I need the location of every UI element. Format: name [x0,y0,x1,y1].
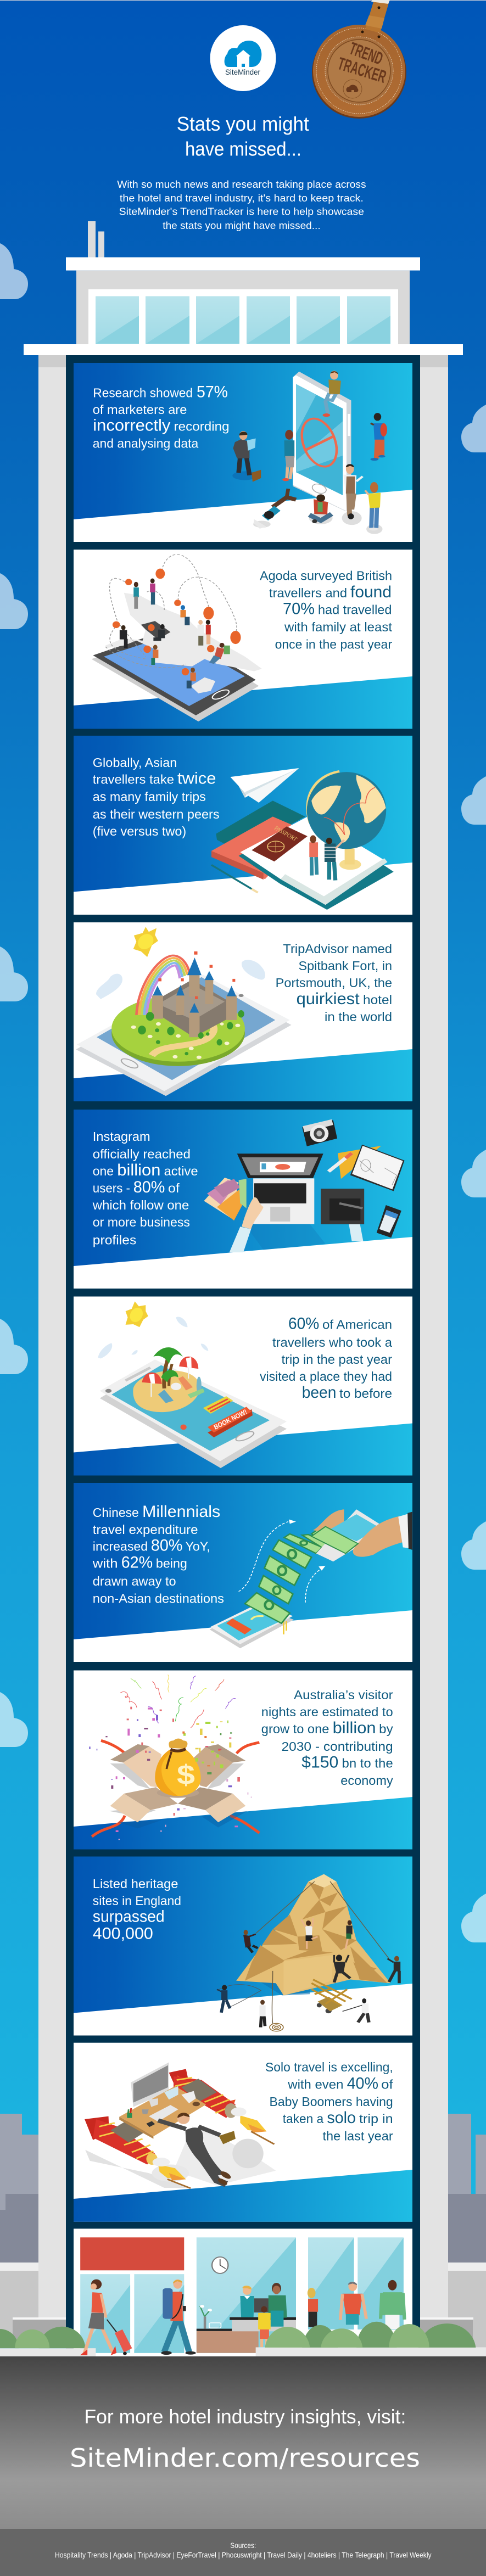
panel 9: heritage sites [74,1857,412,2036]
stat text: been [302,1384,336,1402]
bottom phone [210,1606,294,1648]
intro paragraph [117,178,366,231]
illustration: globe, books and passport [211,768,394,910]
palm tree [153,1347,183,1388]
desk [119,2086,206,2136]
rooftop chimneys [88,221,104,258]
panel 8: Australia visitor nights [74,1670,412,1849]
hands and sleeves [242,1197,264,1229]
stat text: 40% [347,2075,378,2093]
illustration: climbers on a low-poly mountain [217,1874,400,2031]
stat text [92,1129,198,1247]
coil of rope [270,2023,283,2031]
speech bubbles [113,569,241,675]
rockets [169,2069,236,2118]
stat text: Agoda surveyed British [260,569,392,583]
stat text: of [381,2077,393,2092]
stat text: 400,000 [93,1924,153,1942]
stat text: surpassed [93,1908,165,1926]
stat text: of American [322,1317,392,1331]
stat text: Spitbank Fort, in [299,959,392,973]
stat text [276,942,392,1024]
illustration: rocket-powered desk and flying businessman [85,2062,276,2188]
stat text: travellers take [93,772,174,787]
stat text: billion [117,1161,160,1179]
stat text: 62% [121,1553,153,1571]
trees and flowers [138,1010,244,1055]
stat text [265,2060,393,2143]
red sign [80,2237,184,2270]
panel 3: Asian family trips [74,736,412,915]
sidewalk [0,2348,96,2356]
stat text: $150 [301,1754,338,1772]
stat text: twice [177,770,216,788]
bag dollar sign: $ [177,1760,195,1790]
stat text: trip in the past year [281,1352,392,1367]
stat text: travellers and [269,586,347,600]
reception desk [197,2298,296,2353]
skyline: background city buildings [0,2114,486,2266]
stat text: Globally, Asian [93,755,177,770]
clouds [98,1317,208,1358]
stat text: Solo travel is excelling, [265,2060,393,2074]
open book [239,815,394,910]
stat text: incorrectly [93,416,170,434]
phone [100,1365,287,1468]
ribbons [92,1740,259,1836]
swatch fan [204,1178,247,1220]
pencil [211,865,256,892]
guests at right [308,2280,405,2329]
drawing tablet [321,1189,364,1224]
stat text: grow to one [261,1722,329,1736]
panel 6: American repeat travellers [74,1297,412,1476]
dashed routes [105,555,237,668]
stat text: with even [287,2077,343,2092]
backpacker [161,2280,196,2355]
stat text: in the world [325,1010,392,1024]
island [111,1000,245,1066]
box shadows [109,1763,244,1817]
stat text: 80% [133,1178,165,1196]
stat text: Australia’s visitor [294,1688,393,1702]
sand island [133,1370,200,1412]
panel 10: solo travel [74,2043,412,2222]
stat text: 57% [197,383,228,401]
footer: sources: Sources: [230,2541,256,2550]
stat text: sites in England [93,1894,181,1908]
confetti [89,1707,252,1840]
top floor windows [96,296,390,344]
luggage tag: Trend Tracker: TREND [347,38,386,69]
luggage tag: Trend Tracker [312,0,406,119]
stat text: and analysing data [93,436,198,450]
stat text: with [92,1556,118,1570]
stat text: 80% [151,1537,182,1555]
clouds [0,243,486,1942]
side walls and planters [0,2263,486,2348]
stat text [93,1877,181,1942]
stat text: Chinese [93,1505,139,1520]
umbrellas [142,1357,198,1397]
figure: man on phone [323,371,341,417]
stat text: quirkiest [297,990,360,1008]
stat text: Baby Boomers having [269,2095,393,2109]
stat text [260,1314,392,1402]
stat text: 2030 - contributing [281,1739,393,1754]
stat text: being [156,1556,187,1570]
intro paragraph: the hotel and travel industry, it's hard to keep track. [120,192,364,204]
panel 4: quirkiest hotel [74,922,412,1101]
intro paragraph: SiteMinder's TrendTracker is here to help showcase [119,206,364,217]
ropes [256,1881,389,2024]
logo: SiteMinder: SiteMinder [225,68,260,76]
stat text: TripAdvisor named [283,942,392,956]
footer url: SiteMinder.com/resources [70,2443,420,2473]
figure: woman with phone [282,430,294,481]
entrance windows [80,2237,404,2353]
smartphone [377,1205,401,1237]
clouds [96,974,122,999]
stat text: nights are estimated to [261,1705,393,1719]
stat text: by [379,1722,393,1736]
stat text: travellers who took a [272,1335,392,1349]
stat text: 70% [283,600,315,618]
passport [252,826,308,861]
stat text: (five versus two) [93,824,186,838]
stat text: Portsmouth, UK, the [276,976,392,990]
stat text: solo [327,2109,356,2127]
mountain [236,1874,390,1996]
hotel building [24,221,463,2354]
stat text [260,569,393,652]
stat text: of marketers are [93,402,187,417]
money stack on top [311,1526,358,1554]
stat text: travel expenditure [93,1522,198,1537]
globe [307,771,386,870]
stat text: to before [339,1386,392,1401]
figure: woman in yellow [365,482,381,530]
stat text: the last year [323,2129,393,2143]
figure: businessman with laptop [232,431,261,482]
stat text: had travelled [318,603,392,617]
camera [302,1119,337,1146]
button label: BOOK NOW! [213,1408,248,1431]
stat text: taken a [283,2112,323,2126]
stat text: YoY, [186,1539,210,1554]
stat text: users - [93,1181,130,1195]
panel 7: Chinese Millennials [74,1483,412,1662]
money bag [155,1739,201,1798]
intro paragraph: the stats you might have missed... [163,220,321,231]
stat text: non-Asian destinations [93,1591,224,1605]
stat text: Millennials [142,1503,220,1521]
wall clock [212,2257,228,2273]
illustration: phone with world map and people [91,555,262,721]
ruler and notebook [338,1146,381,1179]
monitor [131,2062,169,2107]
intro paragraph: With so much news and research taking place across [117,178,366,190]
castle [153,979,230,1037]
stat text: Instagram [93,1129,150,1144]
footer heading: For more hotel industry insights, visit: [85,2405,406,2428]
panel 1: marketers data [74,363,412,542]
stat text: bn to the [342,1756,393,1771]
scissor lift [311,1980,352,2013]
stat text: increased [93,1539,148,1554]
stat text [261,1688,393,1788]
woman guest [269,2283,287,2327]
brackets [181,2079,217,2102]
stat text [92,1503,224,1605]
stat text [93,383,230,450]
top phone and hand [313,1509,344,1535]
book now button [208,1409,253,1437]
paper plane [230,768,299,803]
streamers [120,1675,236,1728]
figure: lying woman [254,489,296,529]
stat text: or more business [93,1215,190,1229]
stat text: 60% [288,1314,319,1332]
logo: SiteMinder [210,25,276,91]
stat text: Research showed [93,386,193,400]
woman with suitcase [80,2280,132,2355]
illustration: money flying between phones [210,1509,412,1648]
map pieces [105,593,262,693]
footer: sources [0,2529,486,2576]
stat text: which follow one [92,1198,189,1212]
bushes: right group [265,2322,476,2348]
receptionist [240,2286,254,2317]
money bills [245,1524,358,1623]
stat text: active [164,1164,198,1178]
stat text [93,755,220,838]
stat text: officially reached [93,1147,191,1161]
stat text: with family at least [284,620,393,634]
dashed arrows [239,1522,321,1603]
figures [120,578,230,688]
books [216,800,305,852]
figures [309,835,344,880]
stat text: profiles [93,1233,136,1247]
passport label: PASSPORT [273,825,298,843]
illustration: people around a giant phone [232,371,387,534]
stat text: recording [174,419,230,433]
fire [240,2115,274,2144]
shadows [85,2150,191,2188]
stat text: visited a place they had [260,1369,392,1384]
illustration: laptop desk from above [204,1119,405,1252]
stat text: trip in [359,2112,393,2126]
hotel ground floor entrance [0,2228,486,2356]
box flaps [123,1746,161,1787]
stat text: of [168,1181,180,1195]
panel 2: Agoda families [74,550,412,729]
stat text: as many family trips [93,789,206,804]
sun [133,927,158,957]
stat text: once in the past year [275,637,392,652]
stat text: as their western peers [93,807,220,821]
stat text: drawn away to [93,1574,176,1588]
footer: sources: Hospitality Trends | Agoda | TripAdvisor | EyeForTravel | Phocuswright | Travel Daily | 4hoteliers | The Telegraph | Travel Weekly [55,2551,432,2560]
laptop [237,1153,323,1224]
rainbow [136,955,189,1015]
stat text: billion [333,1719,376,1737]
title: have missed... [185,138,301,160]
sun [126,1301,148,1327]
figure: bearded man [343,464,362,519]
figure: man with red backpack [370,413,387,461]
child [258,2306,271,2347]
stat text: hotel [363,993,392,1007]
footer: call to action [0,2356,486,2529]
illustration: castle on a tablet [76,927,292,1096]
flying businessman [158,2113,236,2186]
panel 5: Instagram [74,1110,412,1289]
bushes: left group [0,2327,85,2348]
stat text: one [93,1164,114,1178]
stat text: found [350,583,392,601]
title: Stats you might [177,113,309,135]
stat text: economy [340,1773,393,1788]
illustration: open box with money bag and confetti; coordinates are crop px/3 from panel origin [89,1675,259,1840]
luggage tag: Trend Tracker: TRACKER [336,53,389,87]
inflatable mat [203,1396,233,1414]
deck chairs [158,1390,174,1403]
title [177,113,309,160]
figure: seated man [309,494,332,523]
illustration: island on a phone [98,1301,287,1468]
climbers [217,1918,400,2028]
stat text: Listed heritage [93,1877,178,1891]
